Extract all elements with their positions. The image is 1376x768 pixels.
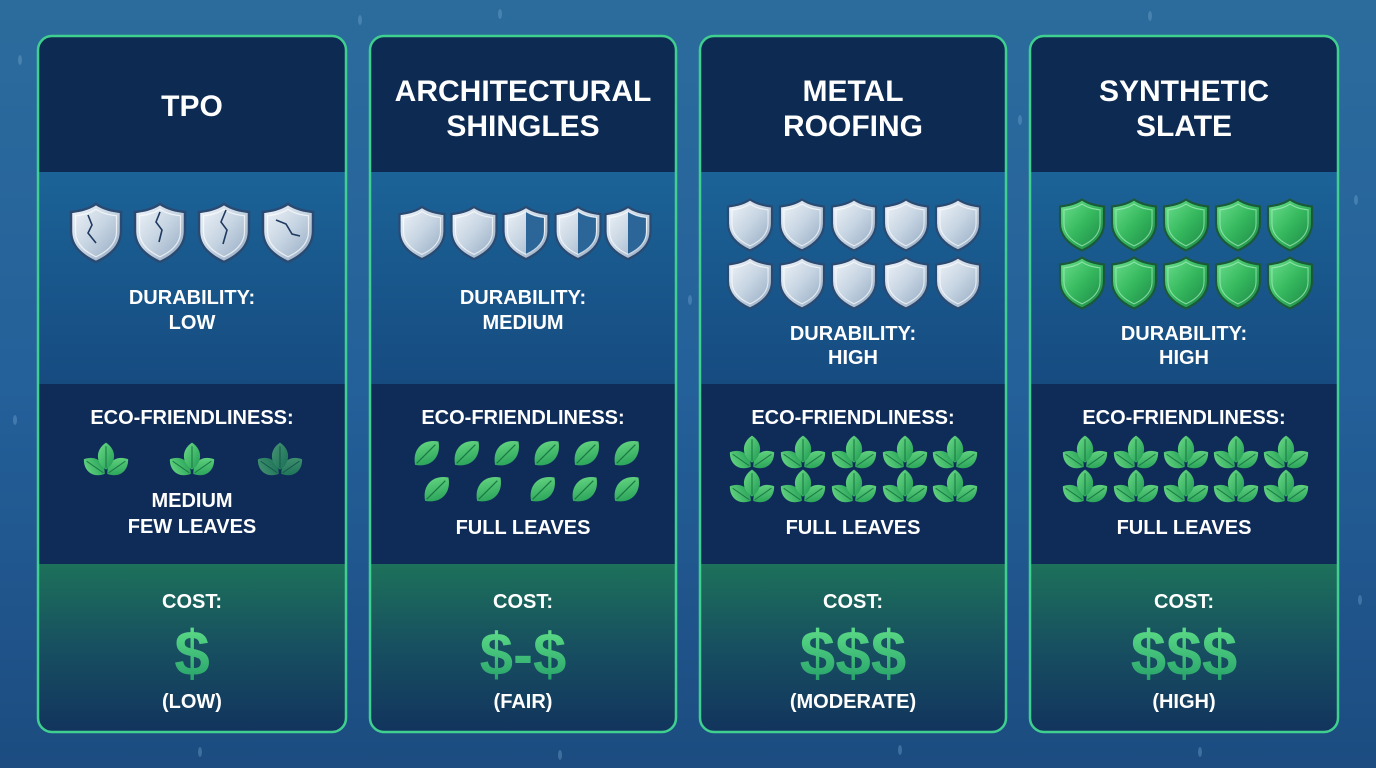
panel: Synthetic Slate: DURABILITY: [1121,323,1247,345]
heading: TPO: TPO [161,90,223,123]
icon: shields 10 [728,199,980,309]
text: medium few leaves: MEDIUM [151,490,233,512]
icon: leaf clusters [725,436,982,507]
panel: Metal Roofing: METAL [802,75,904,108]
panel: Metal Roofing: COST: [823,591,883,613]
panel: Architectural Shingles: MEDIUM [482,312,564,334]
panel: Architectural Shingles: SHINGLES [446,110,600,143]
panel: Metal Roofing: ROOFING [783,110,923,143]
panel: Synthetic Slate: COST: [1154,591,1214,613]
panel: Synthetic Slate: ECO-FRIENDLINESS: [1082,407,1286,429]
icon: cracked shields [71,204,313,262]
icon: leaf clusters [1058,436,1313,507]
panel: Synthetic Slate [1030,36,1338,732]
panel: Synthetic Slate: SYNTHETIC [1099,75,1269,108]
panel: Metal Roofing: FULL LEAVES [786,517,920,539]
cost: COST: [162,591,222,613]
panel: Synthetic Slate: $$$ [1131,617,1237,689]
text: durability low: DURABILITY: [129,287,255,309]
panel: Synthetic Slate: FULL LEAVES [1117,517,1251,539]
panel: Architectural Shingles: ECO-FRIENDLINESS: [421,407,625,429]
panel: Metal Roofing: ECO-FRIENDLINESS: [751,407,955,429]
label: eco-friendliness: ECO-FRIENDLINESS: [90,407,294,429]
panel: TPO: LOW [169,312,215,334]
panel: Metal Roofing [700,36,1006,732]
panel: Synthetic Slate: (HIGH) [1152,691,1216,713]
panel: Synthetic Slate: HIGH [1159,347,1209,369]
panel: Architectural Shingles [370,36,676,732]
panel: Architectural Shingles: (FAIR) [494,691,552,713]
heading: ARCHITECTURAL [395,75,651,108]
panel: Architectural Shingles: $-$ [480,621,566,688]
icon: shields [400,207,650,259]
icon: green shields [1060,199,1312,309]
panel: Architectural Shingles: FULL LEAVES [456,517,590,539]
panel: Metal Roofing: HIGH [828,347,878,369]
panel: Metal Roofing: DURABILITY: [790,323,916,345]
panel: Metal Roofing: $$$ [800,617,906,689]
panel: TPO: (LOW) [162,691,222,713]
panel: Architectural Shingles: COST: [493,591,553,613]
text: durability medium: DURABILITY: [460,287,586,309]
icon: few leaves [79,443,307,480]
panel: TPO [38,36,346,732]
panel: TPO: FEW LEAVES [128,516,256,538]
panel: Metal Roofing: (MODERATE) [790,691,916,713]
panel: Synthetic Slate: SLATE [1136,110,1232,143]
panel: TPO: $ [174,617,210,689]
icon: leaves [408,435,645,508]
